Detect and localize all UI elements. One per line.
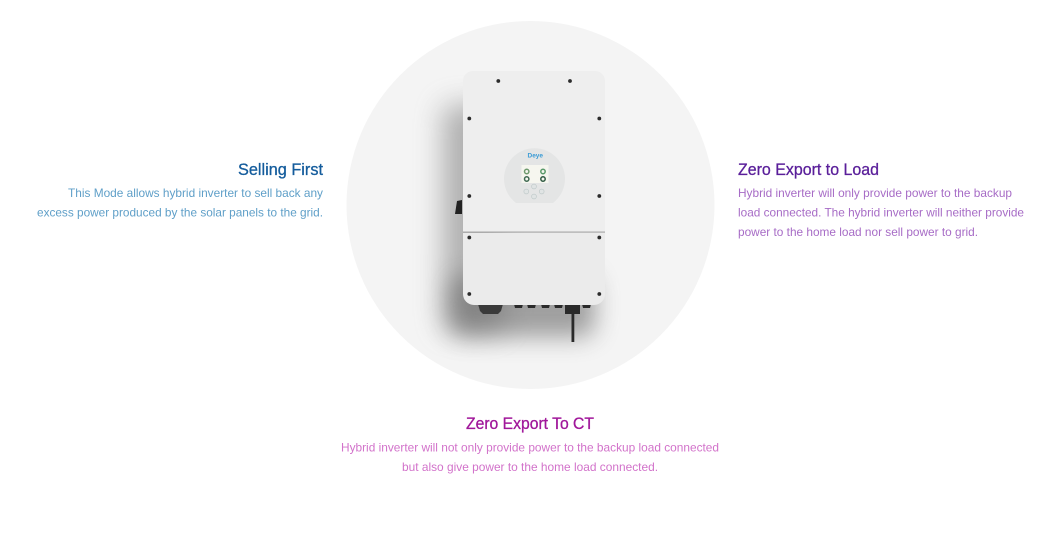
buttons [524,184,544,199]
control panel [504,148,565,203]
description: This Mode allows hybrid inverter to sell back any [68,186,323,200]
description [37,186,323,220]
description: excess power produced by the solar panels to the grid. [37,206,323,220]
lower housing [463,233,605,305]
housing seam [463,232,605,233]
text block: Zero Export to Load [738,161,1024,239]
side handle [455,200,462,214]
description: but also give power to the home load connected. [402,460,658,474]
heading: Zero Export to Load [738,161,879,179]
background circle [346,21,714,389]
description: Hybrid inverter will not only provide power to the backup load connected [341,440,719,454]
text block: Zero Export To CT [341,415,719,474]
heading: Selling First [238,161,323,179]
description [341,440,719,474]
description: Hybrid inverter will only provide power to the backup [738,186,1012,200]
display [522,165,548,183]
bottom glands and cable [478,304,591,342]
logo: Deye [528,152,543,160]
upper housing [463,71,605,232]
heading: Zero Export To CT [466,415,594,433]
screws [467,79,601,296]
description [738,186,1024,239]
text block: Selling First [37,161,323,220]
inverter [455,71,605,342]
description: load connected. The hybrid inverter will neither provide [738,206,1024,220]
inverter drop shadow [443,105,595,337]
description: power to the home load nor sell power to grid. [738,225,978,239]
